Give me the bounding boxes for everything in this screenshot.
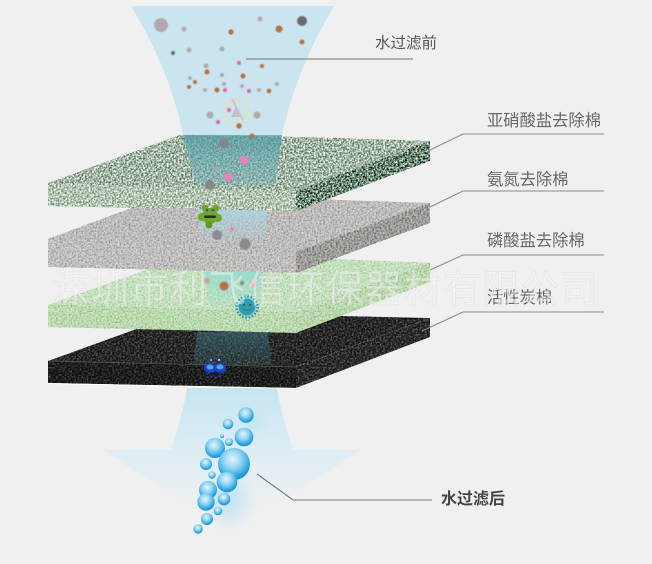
- water column on carbon layer: [193, 332, 272, 365]
- leader line: phosphate sponge: [430, 255, 604, 270]
- arrow: filtered water outflow: [103, 388, 361, 535]
- layer: ammonia nitrogen removal sponge: [48, 190, 430, 273]
- icon: teal virus: [236, 296, 258, 318]
- water column on ammonia layer: [198, 208, 267, 246]
- icon: green germ: [198, 204, 222, 228]
- icon: blue germ: [204, 358, 226, 378]
- label: carbon sponge: 活性炭棉: [487, 289, 552, 307]
- label: phosphate sponge: 磷酸盐去除棉: [487, 232, 585, 250]
- label: water before: 水过滤前: [375, 34, 437, 52]
- layer: activated carbon sponge: [48, 312, 430, 388]
- leader line: water before: [246, 58, 413, 60]
- layer: nitrite removal sponge: [48, 135, 430, 211]
- funnel: water before filtering: [131, 6, 334, 135]
- leader line: carbon sponge: [422, 312, 604, 331]
- leader line: nitrite sponge: [430, 134, 604, 150]
- leader line: ammonia sponge: [430, 191, 604, 207]
- particles: [212, 227, 250, 250]
- water column on phosphate layer: [205, 272, 262, 312]
- label: ammonia sponge: 氨氮去除棉: [487, 171, 568, 189]
- particles: [204, 278, 256, 290]
- icon: pale germ in funnel: [224, 99, 248, 124]
- particles: pollutants in water: [154, 16, 307, 190]
- icon: clean water bubbles: [193, 407, 260, 534]
- layer: phosphate removal sponge: [48, 258, 430, 333]
- leader line: water after: [257, 474, 432, 500]
- label: water after: 水过滤后: [441, 490, 505, 508]
- watermark: 深圳市利飞信环保器材有限公司: [52, 269, 598, 311]
- water column on nitrite layer: [183, 135, 282, 190]
- label: nitrite sponge: 亚硝酸盐去除棉: [487, 112, 601, 130]
